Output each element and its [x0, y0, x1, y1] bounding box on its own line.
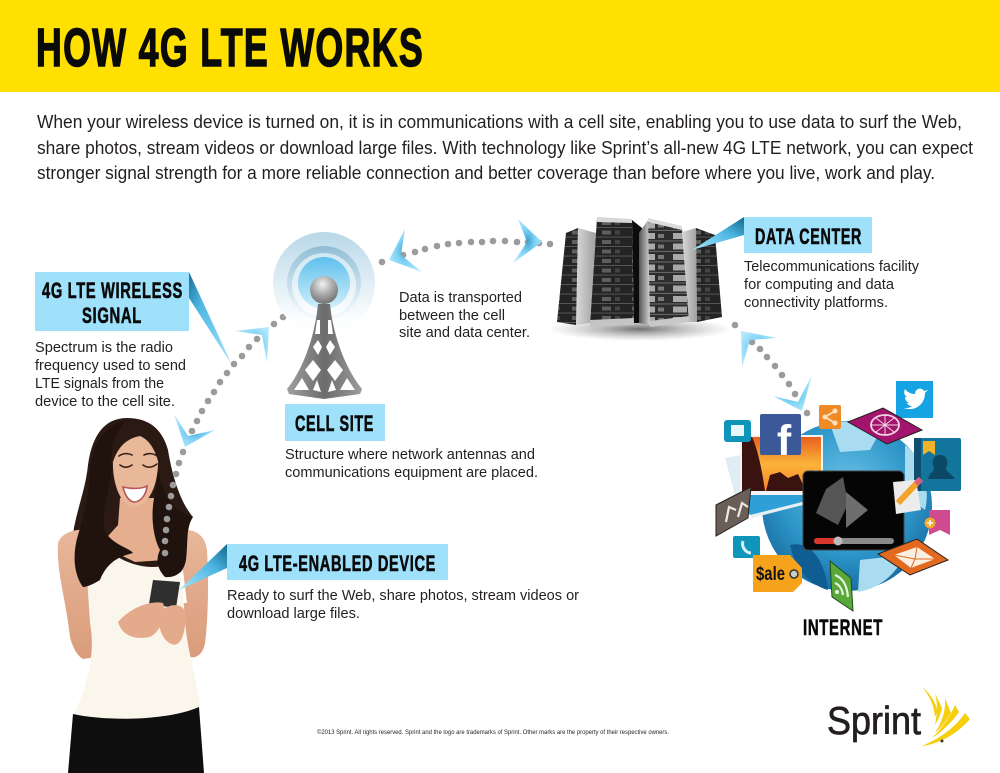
icon: twitter [896, 381, 933, 418]
eyes and brows [119, 454, 157, 467]
title: HOW 4G LTE WORKS [36, 18, 424, 78]
arrow: into device [174, 414, 215, 447]
rack 3 [639, 220, 650, 325]
phone [149, 580, 180, 608]
pointer [692, 217, 744, 250]
arrow: toward cell site [389, 229, 422, 272]
description: Spectrum is the radio [35, 339, 173, 356]
description: device to the cell site. [35, 393, 175, 410]
arrow: into cell site [235, 327, 269, 363]
icon: phone [733, 536, 760, 558]
label box [285, 404, 385, 441]
image: server racks [548, 217, 732, 341]
panel: cell site [273, 232, 538, 481]
icon: music [716, 487, 751, 536]
heading: DATA CENTER [755, 224, 862, 249]
neck and chest [100, 498, 168, 562]
icon: chat [724, 420, 751, 442]
icon: contact book [914, 438, 961, 491]
dotted path: device to cell site [162, 314, 286, 556]
label box [227, 544, 448, 580]
icon: tower [287, 304, 362, 399]
icon: sale tag [753, 555, 802, 592]
label box [744, 217, 872, 253]
heading: 4G LTE-ENABLED DEVICE [239, 551, 436, 576]
dotted path: cell site to data center [379, 238, 553, 265]
face [113, 434, 158, 507]
white top [73, 542, 200, 721]
globe [762, 421, 932, 591]
text: data transport [399, 289, 530, 341]
panel: wireless signal: SIGNAL [82, 303, 142, 328]
left arm [58, 530, 150, 659]
icon: facebook: f [777, 417, 792, 465]
label box [35, 272, 189, 331]
description: frequency used to send [35, 357, 186, 374]
description [285, 446, 538, 481]
icon: signal rings [273, 232, 375, 334]
description: connectivity platforms. [744, 294, 888, 311]
text: data transport: Data is transported [399, 289, 522, 306]
text: data transport: between the cell [399, 307, 505, 324]
hair locks over shoulders [75, 420, 192, 587]
description: Ready to surf the Web, share photos, stream videos or [227, 587, 579, 604]
icon: ball [310, 276, 338, 304]
icon: pink bookmark [924, 510, 950, 535]
Sprint logo [827, 687, 970, 746]
panel: device [179, 544, 579, 622]
description: for computing and data [744, 276, 895, 293]
right arm [160, 530, 208, 657]
panel: wireless signal [35, 272, 232, 410]
dotted path: data center to internet [732, 322, 810, 416]
pointer [189, 272, 232, 365]
rack 2 [590, 218, 634, 325]
icon: purple web diamond [848, 408, 922, 444]
black skirt [68, 707, 204, 773]
heading: 4G LTE WIRELESS [42, 278, 183, 303]
text: data transport: site and data center. [399, 324, 530, 341]
photo sunset [740, 435, 823, 495]
arrow: toward data center [513, 219, 542, 263]
wordmark: Sprint [827, 700, 921, 743]
description: Structure where network antennas and [285, 446, 535, 463]
woman holding phone [58, 418, 208, 773]
copyright: ©2013 Sprint. All rights reserved. Sprint and the logo are trademarks of Sprint. Other marks are the property of their respective owners. [317, 729, 669, 736]
hair over forehead [113, 426, 160, 470]
arrow: toward data center from internet [741, 331, 777, 367]
icon: rss [830, 561, 853, 611]
hair back [72, 418, 193, 587]
rack shadow [548, 317, 732, 341]
pointer [179, 544, 227, 590]
label: INTERNET [803, 615, 883, 640]
icon: mail [878, 539, 948, 575]
description [744, 258, 919, 311]
intro paragraph: stronger signal strength for a more reliable connection and better coverage than before where you live, work and play. [37, 162, 935, 183]
video player [803, 471, 904, 550]
panel: internet [716, 381, 961, 640]
yellow header band [0, 0, 1000, 92]
description [35, 339, 186, 410]
description [227, 587, 579, 622]
intro paragraph [37, 111, 973, 183]
arrow: toward internet [773, 375, 812, 411]
wing [922, 687, 970, 746]
registered dot [940, 740, 944, 742]
smile [123, 486, 147, 502]
icon: share [819, 405, 841, 429]
description: LTE signals from the [35, 375, 164, 392]
icon: sale tag: $ale [756, 564, 785, 585]
heading: CELL SITE [295, 411, 374, 436]
globe continents [830, 422, 927, 592]
hands [118, 602, 186, 645]
photo back [735, 493, 830, 515]
rack 4 [682, 228, 697, 322]
rack 1 [576, 228, 596, 325]
intro paragraph: When your wireless device is turned on, it is in communications with a cell site, enabling you to use data to surf the Web, [37, 111, 962, 132]
description: download large files. [227, 605, 360, 622]
icon: note and pencil [893, 479, 921, 514]
panel: data center [692, 217, 919, 311]
description: Telecommunications facility [744, 258, 919, 275]
description: communications equipment are placed. [285, 464, 538, 481]
icon: facebook [760, 414, 801, 465]
